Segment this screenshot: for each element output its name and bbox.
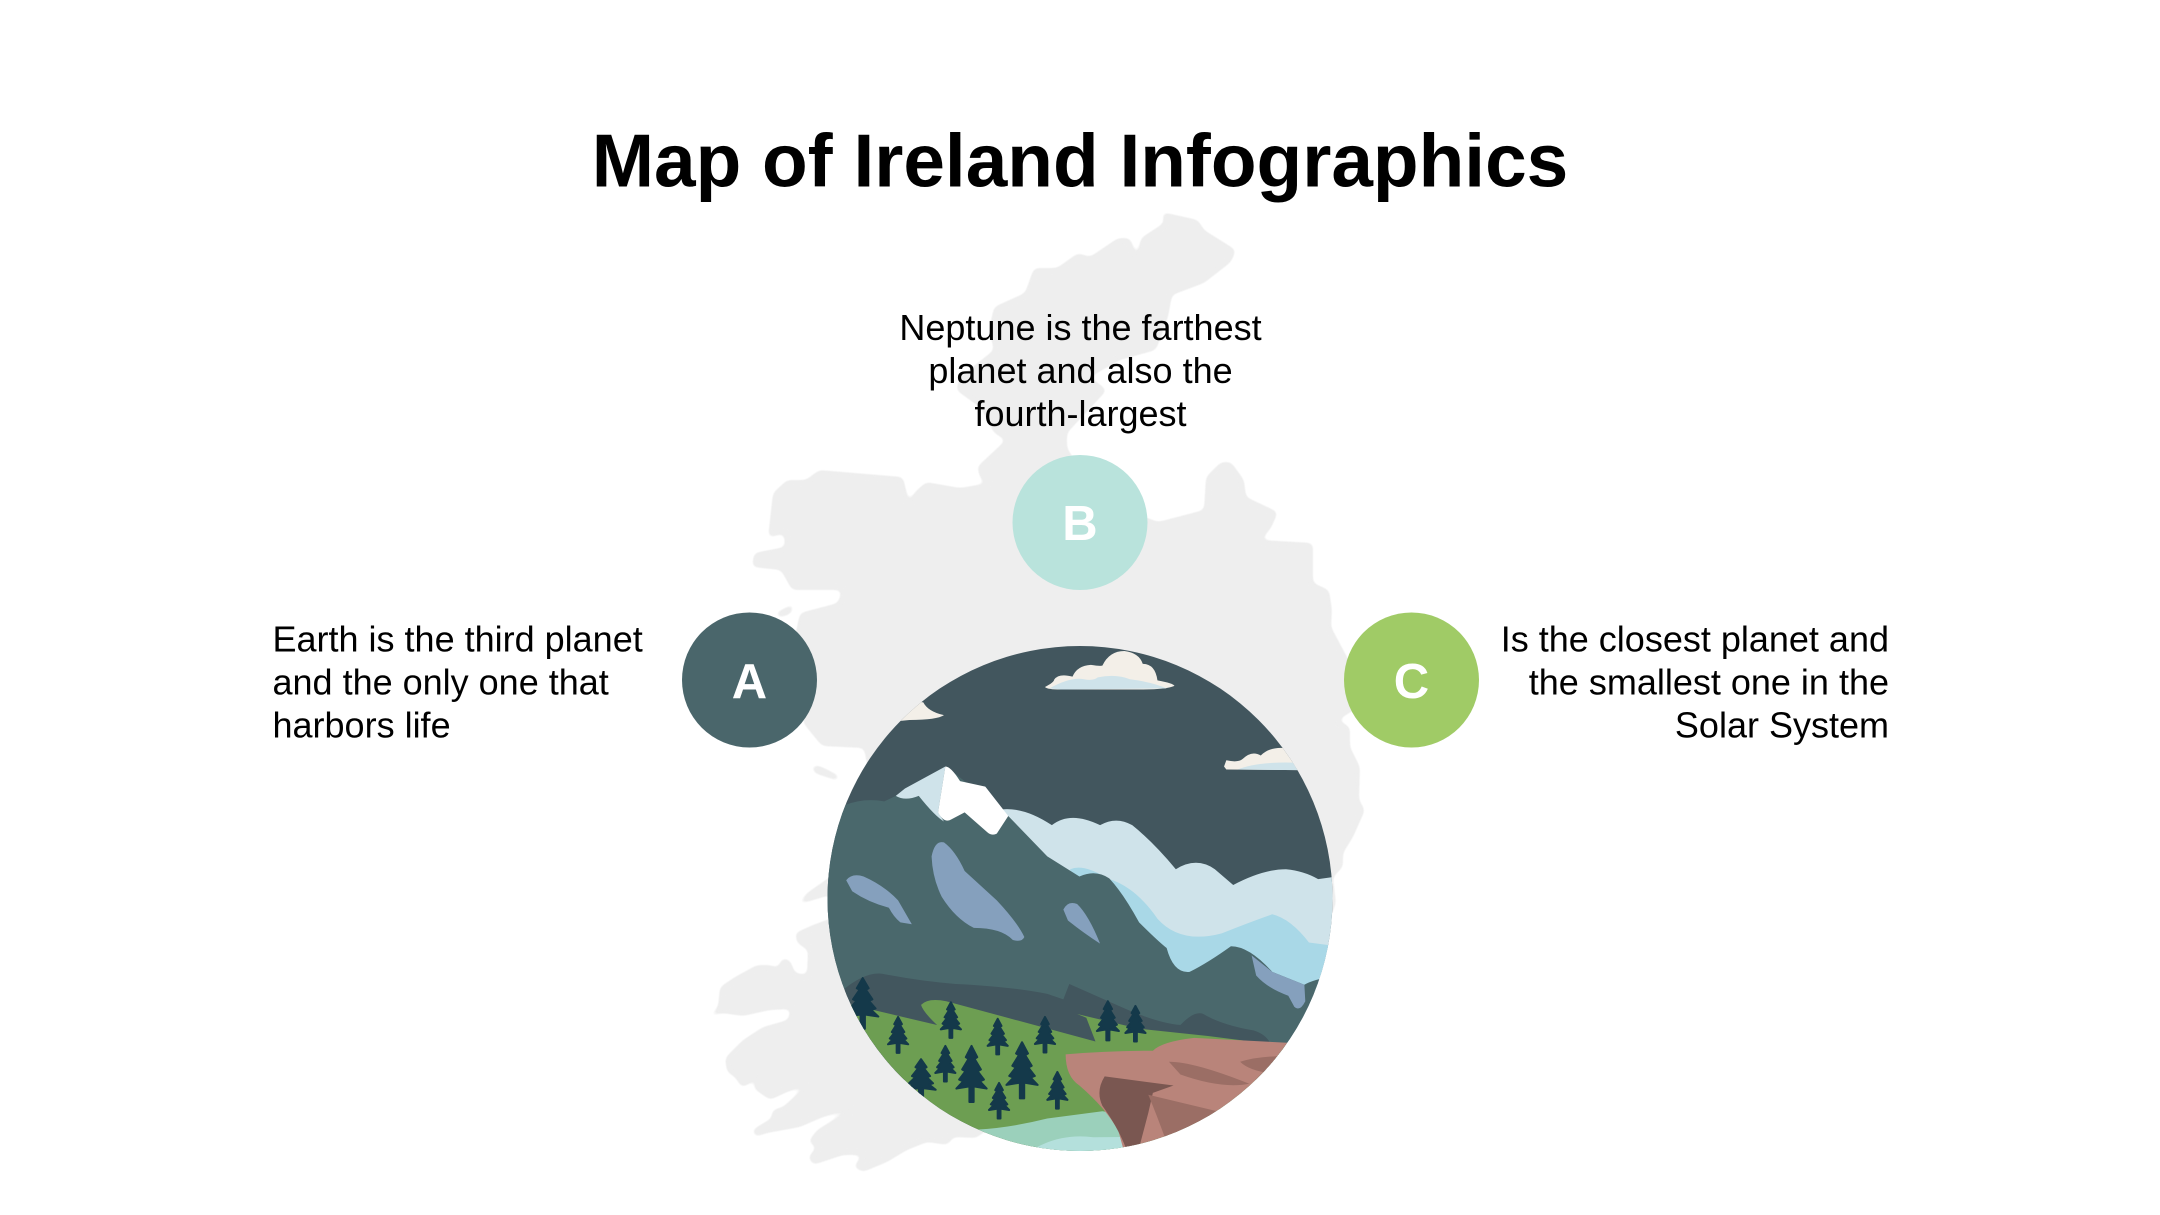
marker B: B <box>1062 497 1098 551</box>
cloud: right <box>1224 748 1300 770</box>
marker C: C <box>1394 655 1429 709</box>
text block: Earth: and the only one that <box>272 662 609 702</box>
marker A <box>682 612 817 748</box>
text block: Neptune: fourth-largest <box>974 393 1187 434</box>
sky <box>828 646 1332 1151</box>
marker C <box>1344 612 1479 748</box>
marker B <box>1012 455 1148 590</box>
trees <box>847 978 1146 1119</box>
cloud: top <box>1045 651 1174 690</box>
title: Map of Ireland Infographics <box>592 118 1568 202</box>
mountain landscape illustration <box>828 646 1332 1151</box>
text block: Mercury: Solar System <box>1675 704 1889 746</box>
text block: Earth: harbors life <box>272 704 451 746</box>
marker A: A <box>732 655 767 709</box>
rock patch: small <box>1063 903 1100 944</box>
text block: Mercury <box>1501 618 1889 746</box>
text block: Earth <box>272 618 643 746</box>
mountain <box>818 767 1337 1080</box>
text block: Mercury: Is the closest planet and <box>1501 618 1889 660</box>
rock patch: center <box>932 842 1024 941</box>
mist: pale <box>1001 809 1337 992</box>
text block: Mercury: the smallest one in the <box>1529 662 1889 702</box>
meadow <box>851 1000 1285 1151</box>
water highlight <box>1037 1136 1136 1151</box>
snow: lit <box>938 767 1008 835</box>
snow: shaded <box>896 767 945 822</box>
mist: blue <box>1070 868 1337 992</box>
rock patch: right <box>1252 955 1305 1009</box>
text block: Neptune: Neptune is the farthest <box>899 307 1262 348</box>
map of Ireland silhouette <box>707 212 1370 1172</box>
rock patch: left <box>846 875 912 924</box>
text block: Neptune: planet and also the <box>928 350 1233 391</box>
text block: Neptune <box>899 307 1262 434</box>
water <box>978 1111 1123 1151</box>
far ridge <box>841 974 1295 1080</box>
text block: Earth: Earth is the third planet <box>272 618 643 660</box>
cloud: left <box>900 702 944 721</box>
cliff shadow <box>1099 1076 1174 1153</box>
cliff <box>1066 1038 1288 1148</box>
cliff strata <box>1148 1056 1281 1142</box>
